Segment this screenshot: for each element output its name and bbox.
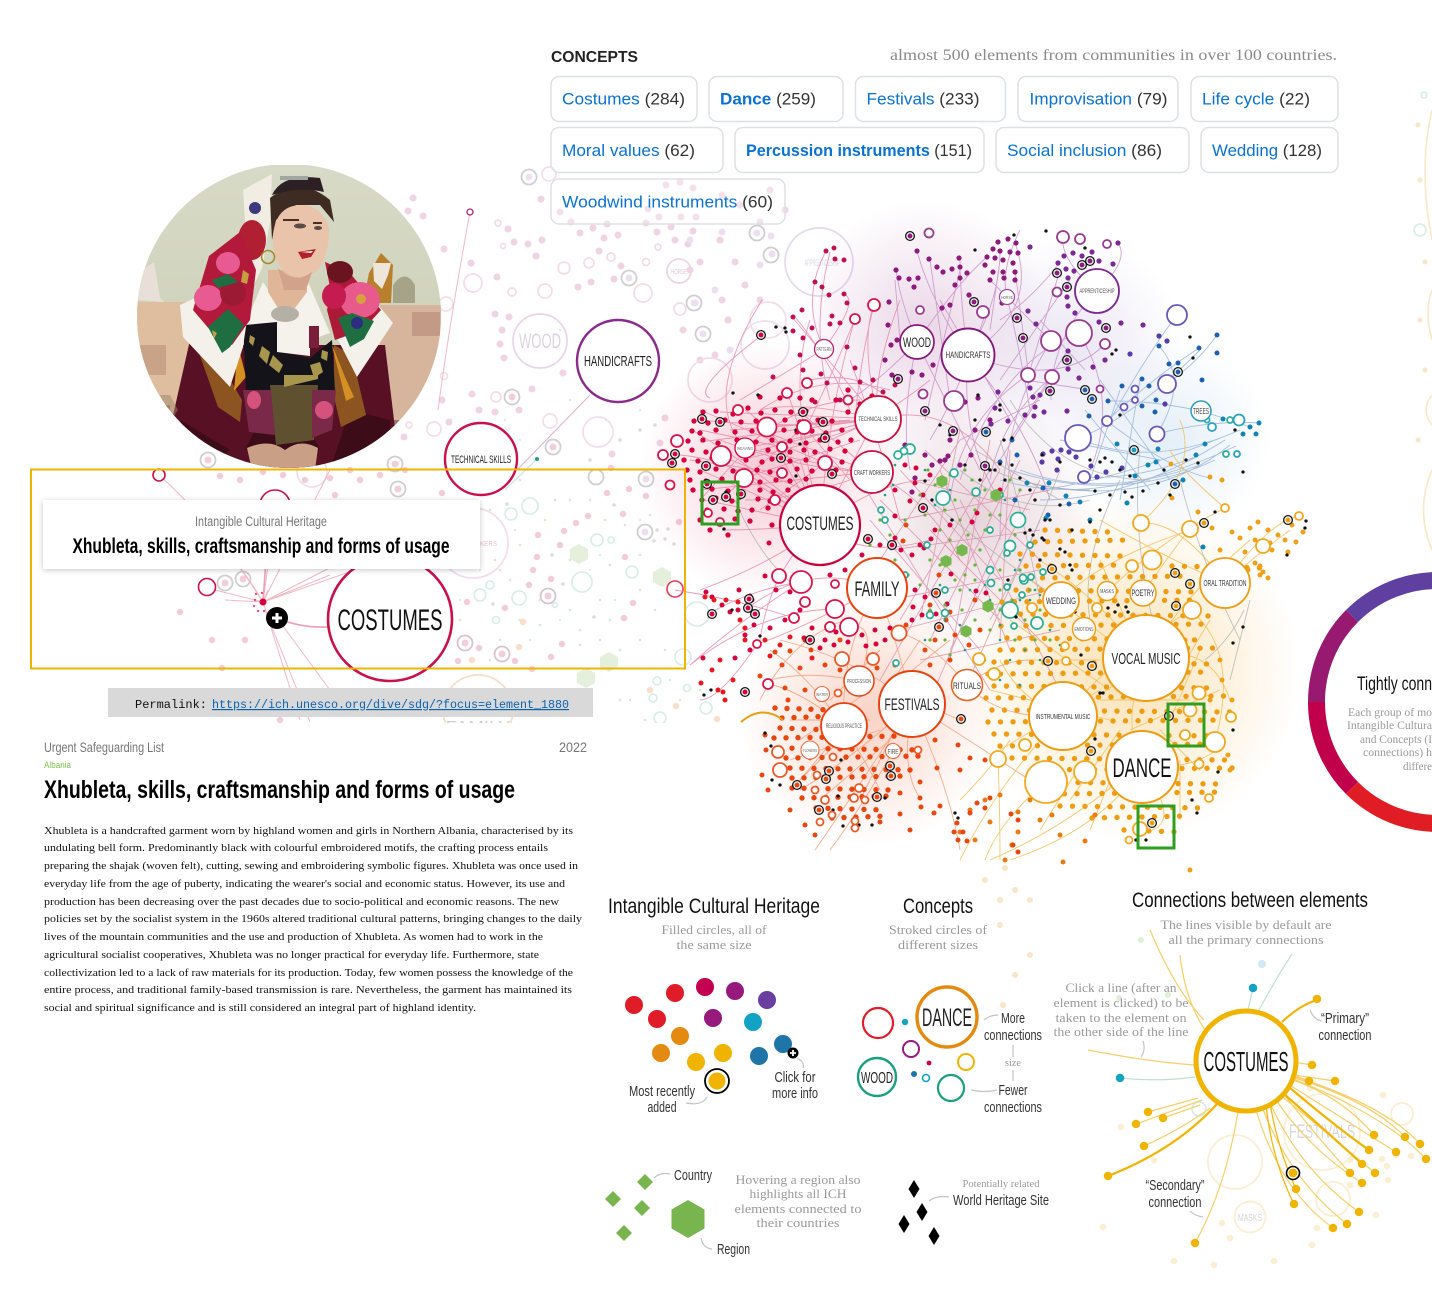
green highlight squares — [702, 482, 1204, 848]
concept: POETRY — [1130, 580, 1156, 606]
article body text: undulating bell form. Predominantly black with colourful embroidered motifs, the crafting process entails — [44, 842, 548, 854]
concept circle: COSTUMES (detail): COSTUMES — [338, 604, 442, 637]
concept filter pills — [551, 76, 1338, 224]
ring heading and text: connections) h — [1363, 745, 1432, 759]
concept: VOCAL MUSIC: VOCAL MUSIC — [1112, 651, 1180, 668]
pill: Social inclusion — [996, 128, 1189, 172]
concept: WOOD: WOOD — [903, 335, 931, 350]
article header: 2022 — [559, 739, 587, 755]
article body text: agricultural socialist cooperatives, Xhubleta was no longer practical for everyday life. Furthermore, state — [44, 949, 539, 961]
legend: Concepts: connections — [984, 1027, 1042, 1044]
legend: Connections between elements: connection — [1148, 1194, 1202, 1211]
network: labelled concept circles — [735, 269, 1250, 803]
concept: FESTIVALS — [879, 671, 945, 737]
legend: Concepts: Fewer — [998, 1082, 1028, 1099]
stroked concept circles — [858, 987, 977, 1101]
concept: HANDICRAFTS: HANDICRAFTS — [946, 350, 990, 360]
concept: FIRE: FIRE — [888, 749, 899, 756]
tooltip card: selected element — [43, 500, 480, 569]
right edge: faded next panel — [1414, 92, 1432, 550]
network: green country dots and teal rings — [870, 417, 1233, 685]
permalink bar — [108, 688, 593, 717]
network: magenta and purple element dots — [885, 239, 1167, 492]
legend: Country and Region: elements connected to — [734, 1201, 862, 1216]
network: unlabelled concept circles — [658, 228, 1303, 844]
article body text: production has been decreasing over the past decades due to socio-political and economic reasons. The new — [44, 896, 559, 908]
concept: DANCE — [1106, 731, 1178, 803]
concept: COSTUMES: COSTUMES — [786, 514, 854, 535]
concept: INSTRUMENTAL MUSIC — [1029, 682, 1097, 750]
legend: Country and Region: Region — [717, 1241, 750, 1258]
pill: Wedding: Wedding (128) — [1212, 141, 1322, 160]
concept: INSTRUMENTAL MUSIC: INSTRUMENTAL MUSIC — [1036, 712, 1091, 721]
legend: World Heritage Site — [898, 1179, 1049, 1245]
network: connection lines — [675, 230, 1300, 860]
legend: Connections between elements: taken to the element on — [1056, 1010, 1187, 1025]
concept: APPRENTICESHIP: APPRENTICESHIP — [1080, 289, 1114, 295]
concept: WOOD — [900, 325, 934, 359]
ring heading and text: Each group of mo — [1348, 705, 1432, 719]
article body text: social and spiritual significance and is still considered an integral part of highland identity. — [44, 1002, 476, 1014]
concept: RITUALS — [952, 670, 982, 700]
concept: FLOWERS — [801, 741, 819, 759]
pill: Life cycle: Life cycle (22) — [1202, 90, 1310, 108]
pill: Costumes: Costumes (284) — [562, 90, 685, 108]
legend: Concepts: More — [1001, 1010, 1025, 1027]
pill: Life cycle — [1191, 76, 1338, 122]
concept: FAMILY: FAMILY — [854, 578, 900, 601]
legend: Connections between elements: FESTIVALS — [1289, 1122, 1355, 1143]
detail view: concept connections of the selected element — [153, 209, 683, 722]
concept: PROCESSION: PROCESSION — [847, 679, 871, 685]
ring heading and text — [1347, 674, 1432, 773]
pill: Moral values: Moral values (62) — [562, 141, 695, 160]
background: faded network behind the detail view: APPRENTICESHIP — [804, 258, 840, 268]
network: blue and teal element dots — [1000, 335, 1259, 547]
concept circle: COSTUMES: COSTUMES — [1204, 1046, 1288, 1077]
background: faded network behind the detail view: KERS — [480, 541, 497, 548]
pill: Social inclusion: Social inclusion (86) — [1007, 141, 1162, 160]
heading: CONCEPTS: CONCEPTS — [551, 49, 638, 66]
concept: MASKS — [1098, 582, 1116, 600]
legend: Connections between elements: The lines visible by default are — [1160, 917, 1332, 932]
intro text fragment: almost 500 elements from communities in over 100 countries. — [890, 47, 1337, 64]
concept circle: TECHNICAL SKILLS (detail) — [445, 423, 517, 495]
concept: TREES: TREES — [1193, 407, 1209, 416]
pill: Wedding — [1201, 128, 1338, 172]
legend: Intangible Cultural Heritage: Intangible Cultural Heritage — [608, 895, 820, 918]
concept: RITUALS: RITUALS — [953, 681, 981, 692]
pill: Woodwind instruments: Woodwind instruments (60) — [562, 192, 773, 212]
concept: TECHNICAL SKILLS: TECHNICAL SKILLS — [858, 416, 898, 423]
concept circle: TECHNICAL SKILLS (detail): TECHNICAL SKILLS — [451, 454, 511, 466]
legend: Intangible Cultural Heritage: Click for — [774, 1069, 816, 1086]
pill: Festivals: Festivals (233) — [866, 90, 980, 108]
tooltip card: selected element: Intangible Cultural Heritage — [195, 514, 327, 529]
concept: MASKS: MASKS — [1100, 589, 1114, 595]
concept: FLOWERS: FLOWERS — [803, 748, 817, 753]
legend: Connections between elements: element is clicked) to be — [1054, 995, 1189, 1010]
legend: Connections between elements: all the primary connections — [1168, 932, 1324, 947]
concept: TECHNICAL SKILLS — [855, 396, 901, 442]
network: link haze — [640, 200, 1300, 845]
concept: ORAL TRADITION: ORAL TRADITION — [1204, 579, 1247, 588]
legend: Country and Region: Country — [674, 1167, 712, 1184]
concept: APPRENTICESHIP — [1075, 269, 1119, 313]
article body text: lives of the mountain communities and the use and production of Xhubleta. As women had to work in the — [44, 931, 543, 943]
network: potential World Heritage Site diamonds — [704, 231, 1306, 840]
concept: HORSE: HORSE — [1001, 295, 1013, 300]
article body text: collectivization led to a lack of raw materials for its production. Today, few women possess the knowledge of the — [44, 967, 573, 979]
legend: Connections between elements: MASKS — [1238, 1213, 1262, 1224]
tooltip card: selected element: Xhubleta, skills, craftsmanship and forms of usage — [72, 535, 450, 558]
stroked concept circles: DANCE — [922, 1004, 972, 1032]
article body text: entire process, and traditional family-based transmission is rare. Nevertheless, the garment has maintained its — [44, 984, 572, 996]
legend: Intangible Cultural Heritage: Filled circles, all of — [662, 922, 767, 937]
concept: WEDDING — [1043, 582, 1079, 618]
faded background of connections diagram — [1103, 940, 1413, 1265]
background: faded network behind the detail view: HORSE — [671, 269, 687, 276]
concept: FESTIVALS: FESTIVALS — [884, 695, 940, 714]
filled element circles — [625, 978, 798, 1093]
concept circle: HANDICRAFTS (detail): HANDICRAFTS — [584, 353, 652, 370]
pill: Improvisation — [1018, 76, 1178, 122]
concept: DANCE: DANCE — [1112, 753, 1172, 783]
concept: EMOTIONS: EMOTIONS — [1074, 627, 1094, 633]
pill: Costumes — [551, 76, 697, 122]
concept: TREES — [1191, 401, 1211, 421]
concept: VOCAL MUSIC — [1103, 615, 1189, 701]
concept: WEAVING: WEAVING — [737, 446, 753, 451]
concept: HANDICRAFTS — [942, 328, 994, 382]
concept: RELIGIOUS PRACTICE — [821, 703, 867, 749]
concept: WATER: WATER — [816, 692, 829, 697]
pill: Percussion instruments: Percussion instruments (151) — [746, 141, 972, 160]
concept: WEAVING — [735, 438, 755, 458]
concept: CRAFT WORKERS: CRAFT WORKERS — [854, 470, 890, 477]
legend: Connections between elements: Connections between elements — [1132, 889, 1368, 912]
network: red-orange element dots — [701, 525, 1018, 852]
network: crimson element dots — [684, 248, 1000, 658]
concept circle: HANDICRAFTS (detail) — [577, 320, 659, 402]
connected element dots — [1108, 999, 1426, 1243]
legend: Concepts: size — [1005, 1058, 1022, 1069]
network: orange element dots — [960, 464, 1303, 870]
pill: Improvisation: Improvisation (79) — [1030, 90, 1168, 108]
concept: PATTERN: PATTERN — [816, 347, 832, 353]
legend: Connections between elements: the other side of the line — [1054, 1024, 1189, 1039]
legend: Concepts: different sizes — [898, 937, 978, 952]
article body text: preparing the shajak (woven felt), cutting, sewing and embroidering symbolic figures. Xhubleta was once used in — [44, 860, 579, 872]
arc: clipped concept circle edge — [741, 712, 783, 722]
pill: Woodwind instruments — [551, 179, 785, 224]
legend: Country and Region: Hovering a region also — [736, 1172, 860, 1187]
concept: WATER — [814, 686, 830, 702]
article body text: policies set by the socialist system in the 1960s altered traditional cultural patterns, bringing changes to the daily — [44, 913, 583, 925]
concept: FAMILY — [847, 558, 907, 618]
legend: Country and Region: their countries — [756, 1215, 840, 1230]
pill: Dance: Dance (259) — [720, 90, 816, 108]
concept circle: COSTUMES — [1196, 1011, 1296, 1111]
article body text: everyday life from the age of puberty, indicating the wearer's social and economic status. However, its use and — [44, 878, 566, 890]
legend: World Heritage Site: World Heritage Site — [953, 1192, 1049, 1209]
legend: Connections between elements: “Secondary” — [1146, 1177, 1205, 1194]
network: most recently added element markers — [672, 236, 1288, 823]
pill: Dance — [709, 76, 843, 122]
concept: RELIGIOUS PRACTICE: RELIGIOUS PRACTICE — [826, 724, 862, 730]
legend: Intangible Cultural Heritage: the same size — [676, 937, 752, 952]
photo: woman in Xhubleta costume — [137, 165, 441, 470]
article header: Urgent Safeguarding List — [44, 739, 164, 755]
permalink bar: Permalink: — [135, 698, 207, 712]
concept: ORAL TRADITION — [1200, 558, 1250, 608]
legend: Concepts: connections — [984, 1099, 1042, 1116]
yellow highlight box — [31, 470, 685, 668]
legend: Connections between elements: Click a line (after an — [1066, 980, 1177, 995]
connection lines — [1088, 930, 1426, 1243]
concept: HORSE — [1000, 290, 1014, 304]
article header: Xhubleta, skills, craftsmanship and forms of usage — [44, 776, 515, 804]
legend: Intangible Cultural Heritage — [608, 895, 820, 1116]
legend: Country and Region: highlights all ICH — [750, 1186, 846, 1201]
background: faded network behind the detail view: FAMILY — [446, 719, 511, 736]
concept: WEDDING: WEDDING — [1046, 596, 1076, 607]
concept circle: COSTUMES (detail) — [328, 557, 452, 681]
stroked concept circles: WOOD — [861, 1070, 893, 1087]
concept: PATTERN — [814, 340, 834, 358]
pill: Percussion instruments — [735, 128, 984, 172]
legend: Country and Region — [605, 1167, 862, 1258]
icon: more info button — [266, 607, 288, 629]
network: region hexagons — [936, 475, 1002, 638]
concept: PROCESSION — [844, 666, 874, 696]
permalink bar: https://ich.unesco.org/dive/sdg/?focus=element_1880 — [212, 698, 569, 712]
legend: Concepts: Stroked circles of — [889, 922, 988, 937]
legend: Intangible Cultural Heritage: Most recently — [629, 1083, 695, 1100]
legend: Connections between elements: connection — [1318, 1027, 1372, 1044]
article body text: Xhubleta is a handcrafted garment worn by highland women and girls in Northern Albania, characterised by its — [44, 825, 573, 837]
legend: Intangible Cultural Heritage: more info — [772, 1085, 818, 1102]
concept: CRAFT WORKERS — [851, 451, 893, 493]
legend: Concepts: Concepts — [903, 895, 973, 918]
concept: POETRY: POETRY — [1132, 588, 1154, 598]
ring: tightly connected groups — [1316, 580, 1432, 824]
legend: World Heritage Site: Potentially related — [962, 1179, 1040, 1190]
article header: Albania — [44, 760, 72, 771]
pill: Moral values — [551, 128, 723, 172]
article body text — [44, 825, 583, 1014]
concept: EMOTIONS — [1072, 618, 1096, 640]
legend: Concepts — [858, 895, 1042, 1116]
article header — [44, 739, 587, 804]
legend: Connections between elements: “Primary” — [1321, 1010, 1369, 1027]
concept: COSTUMES — [780, 485, 860, 565]
background: faded network behind the detail view: WOOD — [519, 330, 561, 353]
legend: Connections between elements — [1054, 889, 1426, 1265]
pill: Festivals — [856, 76, 1006, 122]
background: faded network behind the detail view — [0, 167, 1030, 1005]
concept: FIRE — [886, 744, 900, 758]
legend: Intangible Cultural Heritage: added — [648, 1099, 676, 1116]
